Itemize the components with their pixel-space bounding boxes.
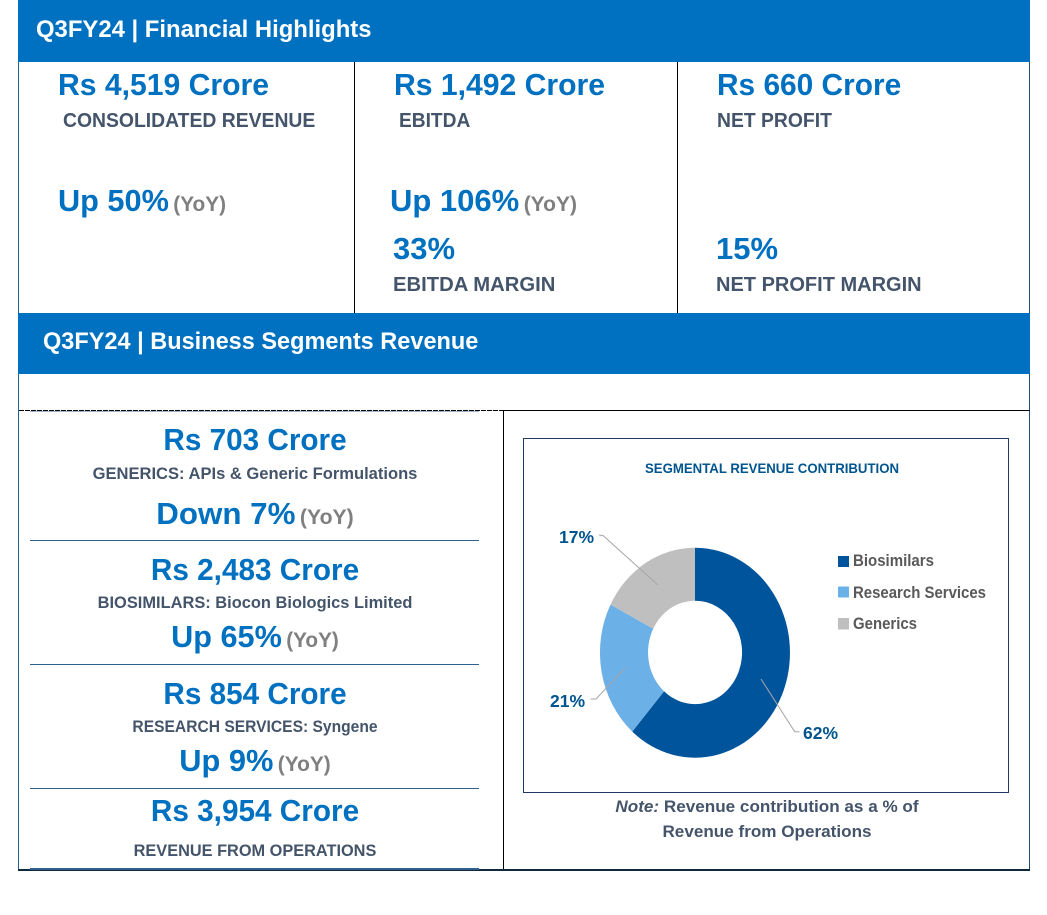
donut slice: research: [600, 605, 664, 732]
leader line: 21%: [590, 668, 625, 699]
metric: EBITDA: Rs 1,492 Crore: [394, 67, 605, 102]
bottom frame line: [18, 869, 1030, 871]
chart: segmental revenue donut: [523, 438, 1009, 793]
rule: [30, 664, 479, 665]
chart: segmental revenue donut: SEGMENTAL REVENUE CONTRIBUTION: [645, 460, 899, 476]
label: EBITDA: EBITDA: [399, 109, 470, 132]
donut slice: generics: [610, 548, 695, 629]
note: Note: Revenue contribution as a % of: [615, 797, 919, 816]
leader line: 62%: [761, 679, 800, 732]
metric: research services: Rs 854 Crore: [163, 676, 347, 711]
growth: EBITDA: Up 106% (YoY): [390, 183, 577, 218]
rule: [30, 788, 479, 789]
growth: biosimilars: Up 65% (YoY): [171, 619, 339, 654]
column divider one: [354, 62, 355, 314]
heading: financial highlights: Q3FY24 | Financial Highlights: [36, 16, 372, 43]
growth: generics: Down 7% (YoY): [156, 496, 354, 531]
heading: business segments: [18, 313, 1030, 374]
dashed rule above left panel: [19, 410, 503, 411]
chart: segmental revenue donut: Biosimilars: [853, 552, 934, 570]
blue rule under dashes: [30, 411, 479, 412]
bottom blue rule: [30, 868, 479, 870]
label: net profit: NET PROFIT: [717, 109, 832, 132]
metric: net profit: Rs 660 Crore: [717, 67, 901, 102]
heading: financial highlights: [18, 0, 1030, 62]
metric: revenue from operations: Rs 3,954 Crore: [151, 793, 359, 828]
chart: segmental revenue donut: Generics: [853, 615, 917, 633]
donut slice: biosimilars: [632, 548, 790, 758]
label: biosimilars: BIOSIMILARS: Biocon Biologics Limited: [98, 593, 412, 612]
metric: revenue: Rs 4,519 Crore: [58, 67, 269, 102]
metric: net profit margin: 15%: [716, 231, 778, 266]
label: EBITDA margin: EBITDA MARGIN: [393, 273, 555, 296]
label: consolidated revenue: CONSOLIDATED REVENUE: [63, 109, 315, 132]
left frame line: [18, 62, 19, 870]
chart: segmental revenue donut: 62%: [803, 723, 838, 743]
leader line: 17%: [599, 535, 658, 585]
metric: generics: Rs 703 Crore: [163, 422, 347, 457]
label: generics: GENERICS: APIs & Generic Formulations: [93, 464, 417, 483]
chart: segmental revenue donut: Research Services: [853, 584, 986, 602]
metric: EBITDA margin: 33%: [393, 231, 455, 266]
heading: business segments: Q3FY24 | Business Segments Revenue: [43, 328, 478, 355]
chart: segmental revenue donut: 17%: [559, 527, 594, 547]
note: Revenue from Operations: [662, 822, 872, 841]
metric: biosimilars: Rs 2,483 Crore: [151, 552, 359, 587]
rule above right panel: [503, 410, 1030, 411]
chart: segmental revenue donut: 21%: [550, 691, 585, 711]
rule: [30, 540, 479, 541]
panel divider: [503, 410, 504, 870]
label: research services: RESEARCH SERVICES: Syngene: [132, 717, 378, 736]
growth: research services: Up 9% (YoY): [179, 743, 331, 778]
growth: revenue: Up 50% (YoY): [58, 183, 226, 218]
label: net profit margin: NET PROFIT MARGIN: [716, 273, 922, 296]
column divider two: [677, 62, 678, 314]
label: revenue from operations: REVENUE FROM OPERATIONS: [134, 841, 376, 860]
note: [615, 797, 919, 841]
right frame line: [1029, 62, 1030, 870]
